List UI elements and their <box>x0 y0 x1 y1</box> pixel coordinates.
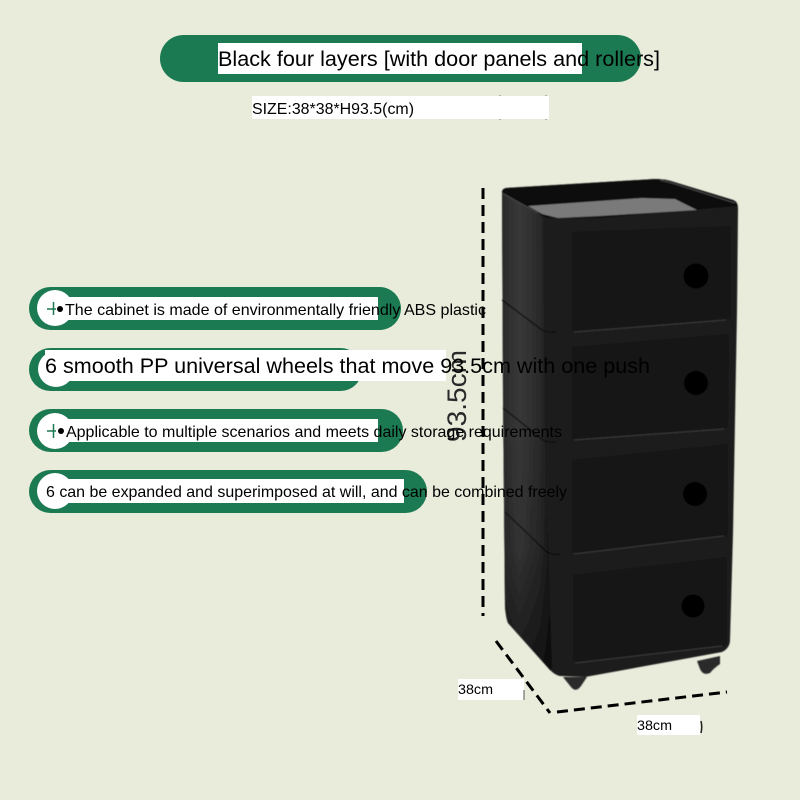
feature: universal wheels <box>29 348 650 391</box>
width dimension line <box>557 692 727 712</box>
depth dimension line <box>496 641 550 713</box>
feature: ABS plastic <box>29 287 486 330</box>
feature: multiple scenarios: Applicable to multiple scenarios and meets daily storage requirements <box>66 424 562 441</box>
left side lower shading <box>503 400 552 670</box>
rim highlight <box>502 180 735 213</box>
drawer door 4 <box>573 557 727 663</box>
feature: multiple scenarios <box>29 409 562 452</box>
depth label <box>458 679 524 700</box>
grey tray surface <box>528 198 697 218</box>
drawer door 2 <box>572 334 729 440</box>
size label: SIZE:38*38*H93.5(cm) <box>252 101 414 118</box>
drawer door 3 <box>572 444 728 554</box>
left wheel <box>563 677 587 690</box>
feature: expandable <box>29 470 567 513</box>
feature: expandable: 6 can be expanded and superimposed at will, and can be combined freely <box>46 484 567 501</box>
feature: ABS plastic: The cabinet is made of environmentally friendly ABS plastic <box>65 302 486 319</box>
title banner: Black four layers [with door panels and rollers] <box>218 48 660 71</box>
side seams <box>502 300 560 554</box>
height label: 93.5cm <box>442 350 472 442</box>
size label <box>252 95 549 120</box>
cabinet body <box>502 179 738 677</box>
feature: universal wheels: 6 smooth PP universal wheels that move 93.5cm with one push <box>45 354 650 378</box>
title banner <box>160 35 660 82</box>
width label: 38cm <box>637 717 672 733</box>
drawer door 1 <box>572 226 731 332</box>
height dimension line <box>482 188 484 616</box>
top rim <box>502 179 737 218</box>
cabinet product photo <box>502 179 738 690</box>
cabinet left side <box>502 193 552 670</box>
depth label: 38cm <box>458 681 493 697</box>
width label <box>637 715 702 735</box>
right wheel <box>697 656 720 674</box>
